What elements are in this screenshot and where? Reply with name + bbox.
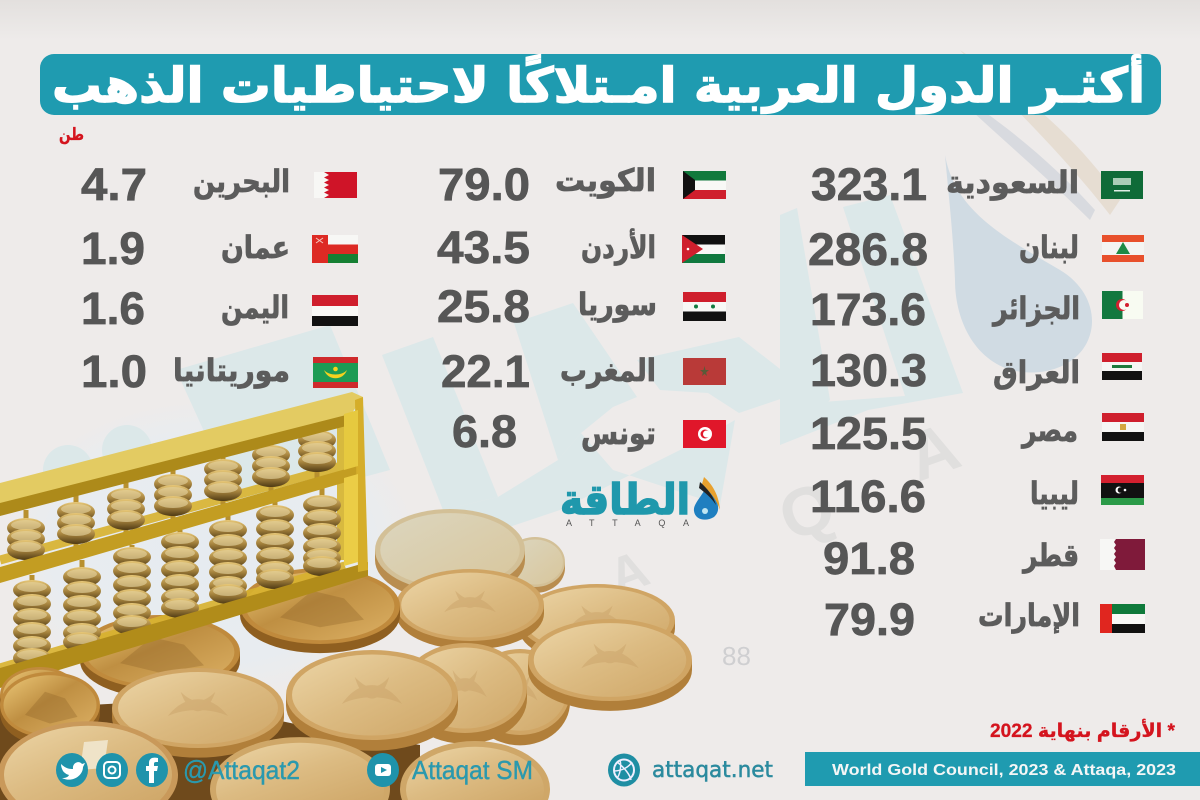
coins in front [0,619,692,800]
website link [608,754,773,786]
name: موريتانيا [173,353,290,389]
flag: Bahrain [314,172,357,198]
name: عمان [221,230,290,266]
name: اليمن [221,290,289,326]
flag: Algeria [1102,291,1143,319]
name: ليبيا [1030,476,1079,512]
value: 6.8 [452,406,517,457]
value: 22.1 [441,346,530,397]
name: تونس [581,416,656,452]
row: Yemen [81,283,358,334]
row: Morocco [441,346,726,397]
name: العراق [993,355,1080,391]
name: لبنان [1019,230,1079,266]
flag: Mauritania [313,357,358,388]
logo: Attaqa [560,475,720,528]
flag: Tunisia [683,420,726,448]
coin: bottom centre [210,737,390,800]
row: Lebanon [808,224,1144,275]
value: 173.6 [810,284,926,335]
row: UAE [824,594,1145,645]
row: Saudi Arabia [811,159,1143,210]
value: 1.6 [81,283,145,334]
name: سوريا [578,287,657,323]
abacus back rails [0,420,345,668]
logo droplet [694,477,720,520]
name: مصر [1020,413,1078,449]
name: المغرب [560,353,656,389]
flag: Jordan [682,235,725,263]
row: Oman [81,223,358,274]
watermark: faded Attaqa logo: Q [769,467,845,556]
flag: Egypt [1102,413,1144,441]
row: Jordan [437,222,725,273]
channel: Attaqat SM [412,755,533,785]
flag: Morocco [683,358,726,385]
website text: attaqat.net [652,758,773,783]
title text: أكثـر الدول العربية امـتلاكًا لاحتياطيات الذهب [52,54,1145,114]
icon: instagram [96,753,128,787]
row: Qatar [823,533,1145,584]
abacus rods and upper beads [7,425,336,570]
coins behind the abacus [80,509,675,698]
watermark: faded Attaqa logo: A [897,408,969,496]
flag: Qatar [1100,539,1145,570]
flag: Syria [683,292,726,321]
column: right (Saudi to UAE) [808,159,1145,645]
column: left (Bahrain to Mauritania) [81,159,358,397]
value: 25.8 [437,281,530,332]
source bar [805,752,1200,786]
value: 91.8 [823,533,915,584]
value: 79.0 [438,159,530,210]
value: 323.1 [811,159,927,210]
row: Iraq [810,345,1142,396]
column: middle (Kuwait to Tunisia) [437,159,726,457]
row: Bahrain [81,159,357,210]
unit label: tons: طن [59,125,84,145]
value: 79.9 [824,594,915,645]
abacus [0,392,368,688]
value: 4.7 [81,159,147,210]
logo latin: ATTAQA [566,518,689,528]
flag: Kuwait [683,171,726,199]
icon: dribbble globe [608,754,640,786]
logo wordmark: الطاقة [560,475,690,524]
flag: UAE [1100,604,1145,633]
footnote: * الأرقام بنهاية 2022 [990,719,1176,742]
name: الكويت [555,163,656,199]
value: 1.9 [81,223,145,274]
row: Libya [810,471,1144,522]
handle: @Attaqat2 [183,755,300,785]
social links [56,753,533,787]
value: 286.8 [808,224,928,275]
name: الجزائر [991,291,1080,327]
row: Mauritania [81,346,358,397]
row: Tunisia [452,406,726,457]
flag: Saudi Arabia [1101,171,1143,199]
title banner [40,54,1161,115]
value: 125.5 [810,408,927,459]
abacus frame [0,392,368,688]
value: 116.6 [810,471,926,522]
row: Egypt [810,408,1144,459]
coin: bottom left [0,721,178,800]
value: 43.5 [437,222,530,273]
watermark: faded Attaqa logo: 88 [722,641,751,671]
row: Kuwait [438,159,726,210]
name: قطر [1021,538,1079,574]
shadow under coin pile [0,700,420,800]
watermark: faded Attaqa logo [43,50,1120,671]
flag: Oman [312,235,358,263]
coin: bottom right [400,741,550,800]
icon: facebook [136,753,168,787]
source text: World Gold Council, 2023 & Attaqa, 2023 [832,762,1176,779]
icon: youtube [367,753,399,787]
value: 1.0 [81,346,147,397]
watermark: faded Attaqa logo: A [601,540,657,607]
flag: Lebanon [1102,235,1144,262]
row: Syria [437,281,726,332]
name: البحرين [193,164,290,200]
name: الإمارات [978,598,1080,634]
flag: Iraq [1102,353,1142,380]
flag: Yemen [312,295,358,326]
icon: twitter [56,753,88,787]
value: 130.3 [810,345,927,396]
name: الأردن [581,228,656,266]
name: السعودية [946,165,1079,201]
flag: Libya [1101,475,1144,505]
abacus lower beads [13,486,341,668]
row: Algeria [810,284,1143,335]
